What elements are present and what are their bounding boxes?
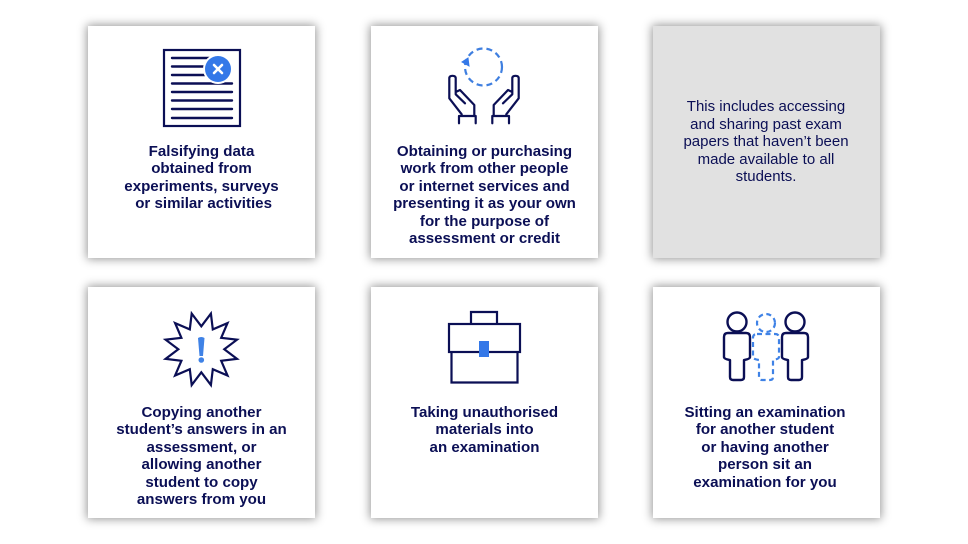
text: unauthorised materials: materials into	[435, 421, 534, 438]
text: falsifying data: obtained from	[151, 160, 252, 177]
text: contract cheating: for the purpose of	[420, 213, 549, 230]
text: unauthorised materials: an examination	[430, 439, 539, 456]
text: contract cheating: work from other people	[401, 160, 568, 177]
panel: past exam papers	[653, 26, 880, 258]
text: falsifying data: or similar activities	[135, 195, 272, 212]
text: impersonation: or having another	[701, 439, 829, 456]
text: past exam papers: students.	[736, 168, 796, 185]
icon: briefcase	[448, 310, 522, 384]
panel: contract cheating	[371, 26, 598, 258]
text: impersonation: Sitting an examination	[684, 404, 846, 420]
text: unauthorised materials: Taking unauthorised	[411, 404, 558, 420]
text: copying answers: Copying another	[142, 404, 261, 420]
text: copying answers: assessment, or	[147, 439, 256, 456]
text: past exam papers	[683, 98, 849, 185]
panel: unauthorised materials	[371, 287, 598, 518]
text: falsifying data: Falsifying data	[149, 142, 254, 160]
text: contract cheating: or internet services and	[399, 178, 570, 195]
icon: starburst with exclamation mark	[162, 310, 240, 388]
text: falsifying data	[124, 142, 279, 212]
panel: copying answers	[88, 287, 315, 518]
text: impersonation: examination for you	[693, 474, 837, 491]
panel: falsifying data	[88, 26, 315, 258]
text: falsifying data: experiments, surveys	[124, 178, 279, 195]
text: copying answers	[116, 404, 287, 508]
text: impersonation	[684, 404, 846, 491]
text: past exam papers: and sharing past exam	[690, 116, 842, 133]
text: impersonation: for another student	[696, 421, 834, 438]
icon: hands with cycle arrow	[448, 47, 520, 124]
text: contract cheating: presenting it as your own	[393, 195, 576, 212]
text: copying answers: allowing another	[142, 456, 261, 473]
text: past exam papers: This includes accessing	[687, 98, 845, 115]
text: past exam papers: made available to all	[698, 151, 834, 168]
panel: impersonation	[653, 287, 880, 518]
text: copying answers: student to copy	[145, 474, 258, 491]
text: contract cheating	[393, 142, 576, 247]
text: copying answers: answers from you	[137, 491, 266, 508]
icon: three people	[722, 311, 810, 382]
text: copying answers: student’s answers in an	[116, 421, 287, 438]
text: contract cheating: assessment or credit	[409, 230, 560, 247]
text: past exam papers: papers that haven’t been	[683, 133, 849, 150]
text: impersonation: person sit an	[718, 456, 812, 473]
text: contract cheating: Obtaining or purchasing	[397, 142, 572, 160]
icon: document with cross	[162, 48, 242, 128]
text: unauthorised materials	[411, 404, 558, 456]
